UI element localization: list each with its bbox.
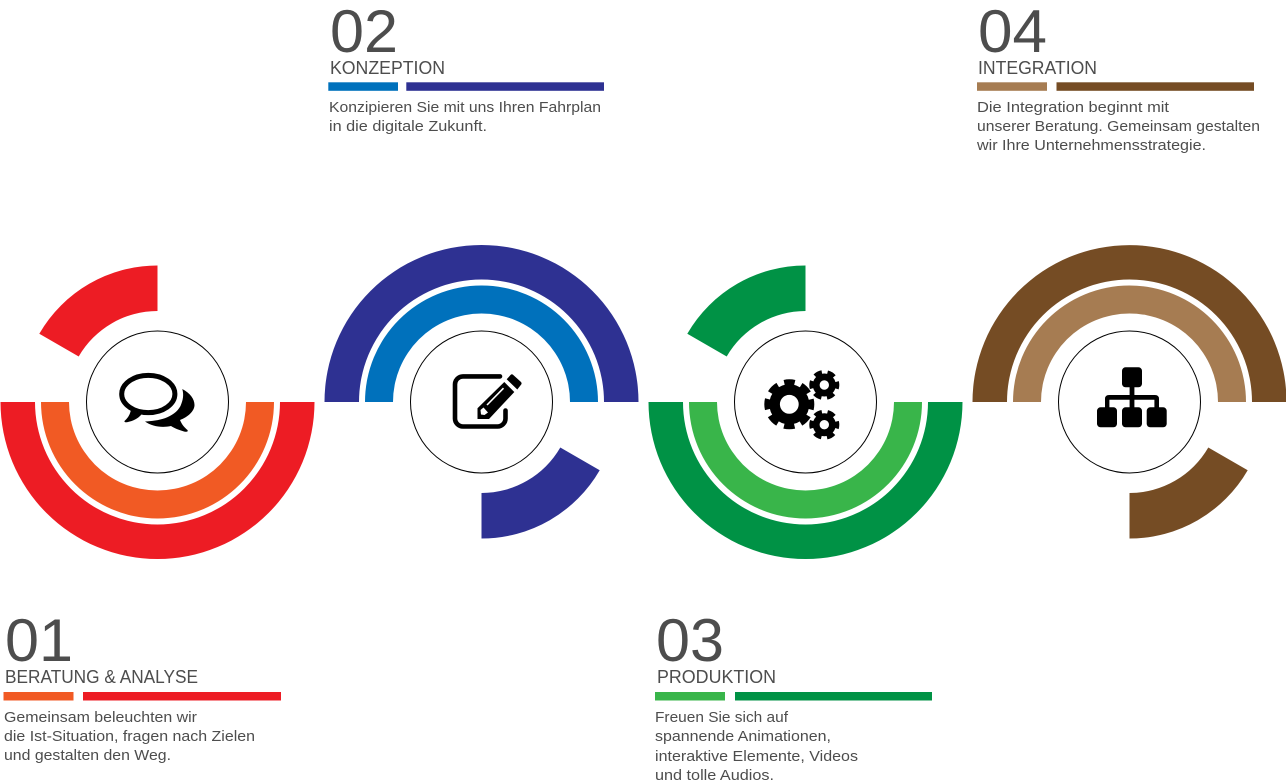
icon: speech bubbles: [122, 375, 194, 432]
text block 04: [976, 0, 1260, 154]
brown outer half ring: [972, 245, 1286, 402]
light green inner half ring: [689, 402, 922, 518]
step 04 graphic: [972, 245, 1286, 538]
icon: gears: [768, 372, 837, 438]
red upper arc: [39, 266, 157, 356]
description 01: [4, 709, 255, 764]
icon: pencil on note: [455, 374, 522, 426]
heading 01: BERATUNG & ANALYSE: [5, 667, 198, 687]
step 01 graphic: [0, 266, 314, 559]
number 02: 02: [330, 0, 398, 65]
text block 03: [655, 607, 932, 784]
step 03 graphic: [648, 266, 962, 559]
green upper arc: [687, 266, 806, 356]
description 03: [655, 709, 858, 784]
tan inner half ring: [1013, 286, 1246, 402]
description 02: Konzipieren Sie mit uns Ihren Fahrplan: [329, 99, 601, 116]
number 01: 01: [5, 607, 73, 674]
blue inner half ring: [365, 286, 598, 402]
bars 03: [655, 692, 932, 700]
description 04: wir Ihre Unternehmensstrategie.: [976, 137, 1206, 154]
icon: organisation chart: [1097, 367, 1167, 427]
green outer half ring: [648, 402, 962, 559]
orange inner half ring: [41, 402, 274, 518]
icon circle: [410, 331, 552, 473]
bars 04: [977, 82, 1254, 91]
icon circle: [1058, 331, 1200, 473]
bars 01: [4, 692, 281, 700]
description 04: [976, 99, 1260, 154]
text block 01: [4, 607, 281, 764]
heading 04: INTEGRATION: [978, 58, 1097, 78]
brown lower arc: [1130, 448, 1248, 538]
heading 02: KONZEPTION: [330, 58, 445, 78]
description 04: Die Integration beginnt mit: [977, 99, 1170, 116]
heading 03: PRODUKTION: [657, 667, 776, 687]
icon circle: [86, 331, 228, 473]
text block 02: [328, 0, 604, 135]
navy outer half ring: [324, 245, 638, 402]
description 03: interaktive Elemente, Videos: [655, 748, 858, 765]
number 04: 04: [978, 0, 1047, 65]
step 02 graphic: [324, 245, 638, 539]
description 03: Freuen Sie sich auf: [655, 709, 789, 726]
description 03: und tolle Audios.: [655, 767, 774, 784]
description 01: Gemeinsam beleuchten wir: [4, 709, 197, 726]
description 03: spannende Animationen,: [655, 728, 831, 745]
bars 02: [328, 82, 604, 91]
outer red half ring: [0, 402, 314, 559]
description 02: [329, 99, 601, 135]
description 01: und gestalten den Weg.: [4, 747, 171, 764]
number 03: 03: [656, 607, 724, 674]
description 01: die Ist-Situation, fragen nach Zielen: [4, 728, 255, 745]
description 04: unserer Beratung. Gemeinsam gestalten: [977, 118, 1260, 135]
icon circle: [734, 331, 876, 473]
navy lower arc: [482, 448, 600, 538]
description 02: in die digitale Zukunft.: [329, 118, 487, 135]
